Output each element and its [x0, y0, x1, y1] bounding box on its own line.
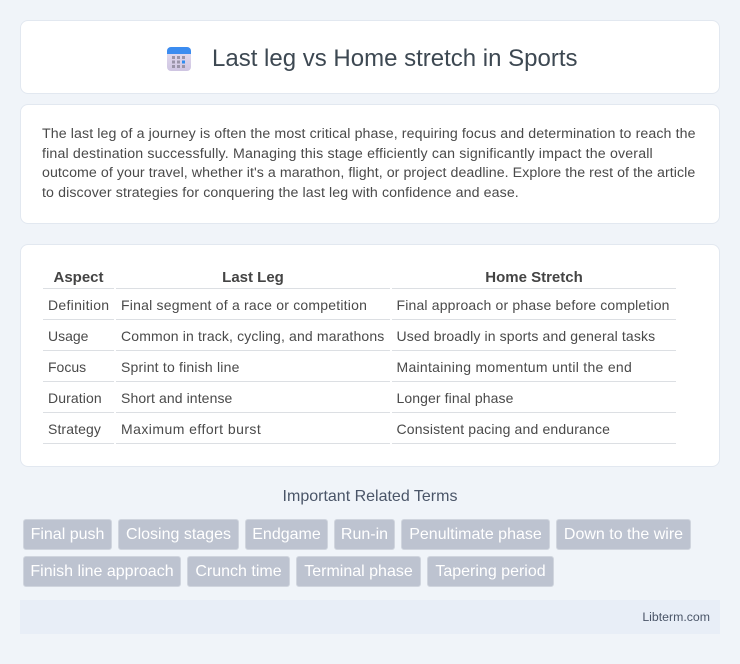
footer source: Libterm.com: [642, 610, 710, 624]
comparison table: Usage: [48, 328, 88, 344]
panel: comparison table: [20, 244, 720, 467]
comparison table: Short and intense: [121, 390, 232, 406]
comparison table: Final approach or phase before completion: [396, 297, 670, 313]
comparison table: Maximum effort burst: [121, 421, 261, 437]
comparison table: Definition: [48, 297, 109, 313]
related terms tags: Run-in: [341, 526, 388, 543]
comparison table: [43, 269, 676, 444]
panel: header: [20, 20, 720, 94]
comparison table: Maintaining momentum until the end: [396, 359, 632, 375]
table header: Last Leg: [222, 269, 284, 286]
comparison table: Strategy: [48, 421, 101, 437]
related terms heading: Important Related Terms: [283, 488, 457, 505]
title: Last leg vs Home stretch in Sports: [212, 45, 577, 72]
related terms tags: Closing stages: [126, 526, 231, 543]
intro paragraph: final destination successfully. Managing this stage efficiently can significantly impact the overall: [42, 146, 653, 162]
intro paragraph: to discover strategies for conquering the last leg with confidence and ease.: [42, 185, 519, 201]
table header: [43, 269, 676, 444]
table header: Home Stretch: [485, 269, 583, 286]
related terms tags: Finish line approach: [30, 563, 174, 580]
comparison table: Common in track, cycling, and marathons: [121, 328, 384, 344]
icon: calendar: [167, 47, 191, 71]
intro paragraph: outcome of your travel, whether it's a marathon, flight, or project deadline. Explore the rest of the article: [42, 165, 695, 181]
comparison table: Longer final phase: [396, 390, 514, 406]
related terms tags: Penultimate phase: [409, 526, 542, 543]
related terms tags: Terminal phase: [304, 563, 413, 580]
comparison table: Final segment of a race or competition: [121, 297, 367, 313]
panel: intro text: [20, 104, 720, 224]
table header: Aspect: [53, 269, 104, 286]
intro paragraph: The last leg of a journey is often the most critical phase, requiring focus and determination to reach the: [42, 126, 696, 142]
related terms tags: Final push: [31, 526, 104, 543]
comparison table: Consistent pacing and endurance: [396, 421, 610, 437]
comparison table: Used broadly in sports and general tasks: [396, 328, 655, 344]
comparison table: Focus: [48, 359, 86, 375]
related terms tags: Down to the wire: [564, 526, 683, 543]
related terms tags: Tapering period: [435, 563, 546, 580]
intro paragraph: [42, 126, 696, 201]
footer: [20, 600, 720, 634]
comparison table: Duration: [48, 390, 102, 406]
comparison table: Sprint to finish line: [121, 359, 240, 375]
related terms tags: Endgame: [252, 526, 321, 543]
related terms tags: Crunch time: [195, 563, 282, 580]
related terms tags: [23, 519, 691, 587]
